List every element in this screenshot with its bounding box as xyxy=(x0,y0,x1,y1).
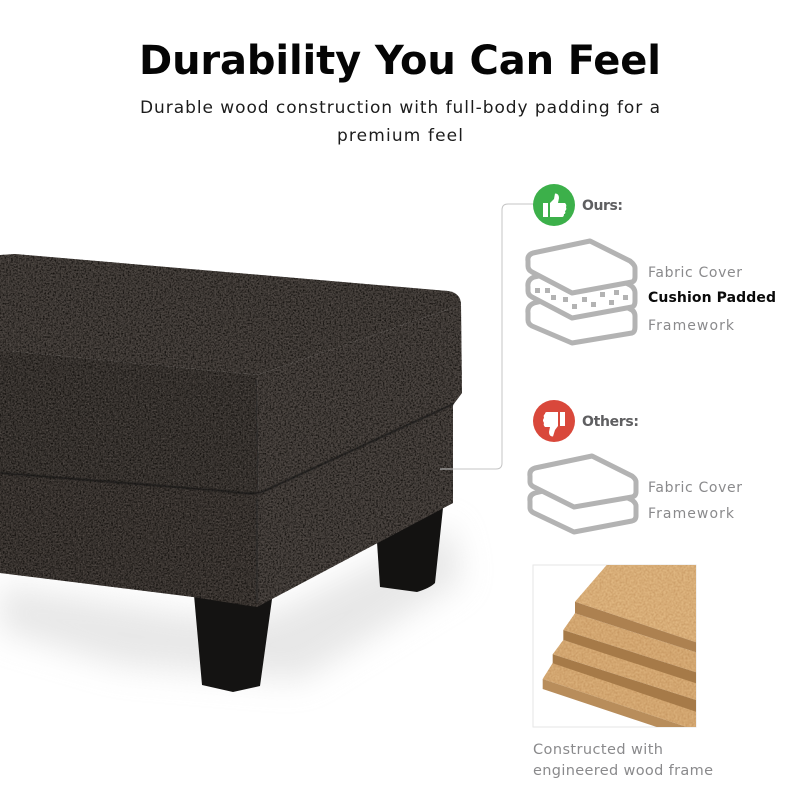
connector line xyxy=(440,204,534,469)
corner seam xyxy=(256,380,258,603)
labels: ours: Fabric Cover xyxy=(648,265,742,281)
ottoman base side xyxy=(257,403,453,607)
heading: ours: Ours: xyxy=(582,198,623,214)
fabric cover layer xyxy=(530,456,636,507)
layers: others xyxy=(530,456,636,532)
icon: thumbs up xyxy=(533,184,575,226)
caption: engineered wood frame xyxy=(533,763,713,779)
framework layer xyxy=(528,290,635,343)
ottoman top surface xyxy=(0,254,461,375)
back leg xyxy=(377,508,443,592)
labels: ours: Framework xyxy=(648,318,735,334)
labels: ours: Cushion Padded xyxy=(648,290,776,306)
subtitle xyxy=(140,98,660,146)
caption xyxy=(533,742,713,779)
subtitle: premium feel xyxy=(337,126,463,146)
cushion side xyxy=(257,305,462,495)
icon: thumbs down xyxy=(533,400,575,442)
subtitle: Durable wood construction with full-body padding for a xyxy=(140,98,660,118)
floor shadow xyxy=(0,525,462,680)
third board xyxy=(553,640,696,700)
heading: others: Others: xyxy=(582,414,639,430)
second board xyxy=(563,613,696,672)
labels: others xyxy=(648,480,742,522)
labels: others: Fabric Cover xyxy=(648,480,742,496)
padding dots xyxy=(535,288,628,309)
front leg xyxy=(194,592,273,692)
title: Durability You Can Feel xyxy=(139,38,661,84)
cushion seam xyxy=(0,404,453,493)
cushion layer xyxy=(528,265,635,318)
caption: Constructed with xyxy=(533,742,663,758)
framework layer xyxy=(530,480,636,532)
fabric cover layer xyxy=(528,241,635,293)
photo: engineered wood boards xyxy=(533,565,696,727)
ottoman base front xyxy=(0,470,257,607)
top board xyxy=(575,565,696,642)
bottom board xyxy=(543,663,696,727)
labels: ours xyxy=(648,265,776,334)
layers: ours xyxy=(528,241,635,343)
cushion front xyxy=(0,350,259,495)
labels: others: Framework xyxy=(648,506,735,522)
ottoman xyxy=(0,254,462,692)
